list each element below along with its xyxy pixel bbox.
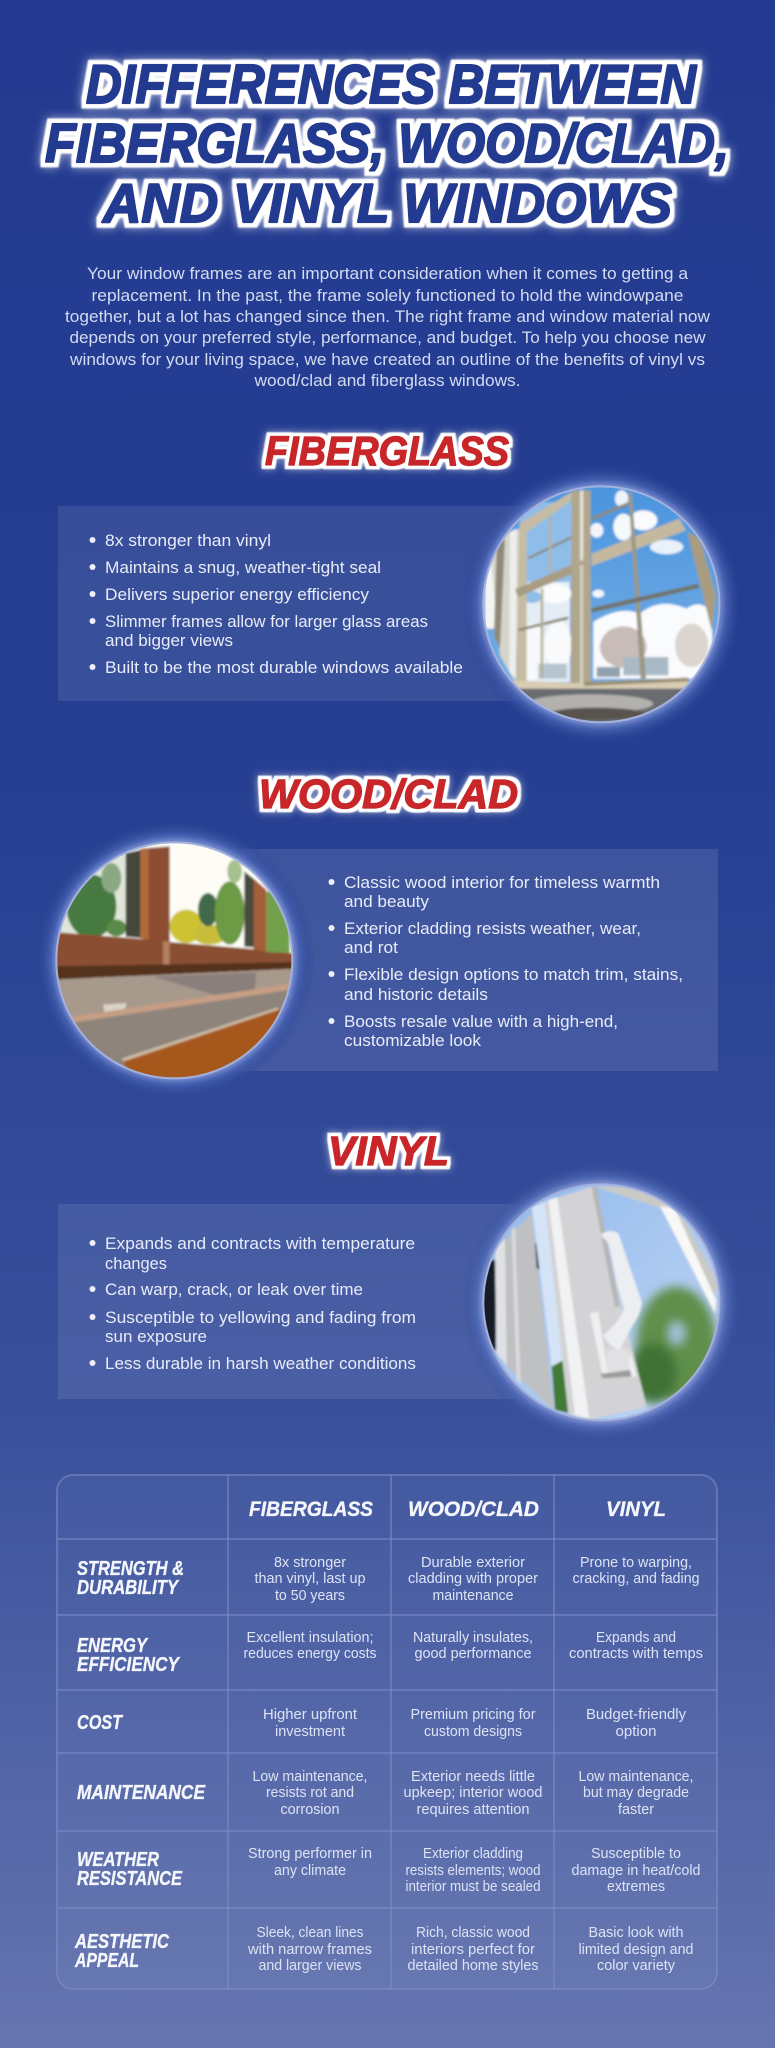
row: strength and durability: STRENGTH &: [77, 1558, 184, 1580]
row: energy efficiency: Expands and: [596, 1630, 676, 1646]
row: strength and durability: cladding with proper: [408, 1571, 538, 1587]
panel: wood/clad: [35, 820, 718, 1100]
row: cost: Premium pricing for: [410, 1707, 536, 1723]
panel: fiberglass: [58, 464, 742, 744]
vinyl bullet list: Can warp, crack, or leak over time: [105, 1280, 363, 1299]
vinyl bullet list: Susceptible to yellowing and fading from: [105, 1308, 416, 1327]
row: strength and durability: 8x stronger: [274, 1555, 346, 1571]
row: cost: Budget-friendly: [586, 1707, 687, 1723]
vinyl bullet list: Less durable in harsh weather conditions: [105, 1354, 416, 1373]
row: strength and durability: DURABILITY: [77, 1577, 179, 1599]
intro paragraph: [65, 265, 710, 390]
row: maintenance: Low maintenance,: [578, 1769, 694, 1785]
row: weather resistance: resists elements; wood: [406, 1863, 540, 1879]
row: maintenance: but may degrade: [583, 1785, 689, 1801]
row: aesthetic appeal: Basic look with: [588, 1925, 684, 1941]
row: strength and durability: to 50 years: [275, 1588, 345, 1604]
row: aesthetic appeal: color variety: [597, 1958, 676, 1974]
title: FIBERGLASS, WOOD/CLAD,: [45, 112, 729, 174]
row: strength and durability: [77, 1555, 700, 1604]
fiberglass bullet list: and bigger views: [105, 631, 233, 650]
row: aesthetic appeal: Rich, classic wood: [416, 1925, 530, 1941]
row: aesthetic appeal: detailed home styles: [408, 1958, 538, 1974]
fiberglass bullet list: Maintains a snug, weather-tight seal: [105, 558, 381, 577]
row: aesthetic appeal: Sleek, clean lines: [256, 1925, 364, 1941]
row: aesthetic appeal: interiors perfect for: [411, 1942, 535, 1958]
photo: white vinyl window handle: [472, 1170, 733, 1434]
fiberglass bullet list: Slimmer frames allow for larger glass areas: [105, 612, 428, 631]
heading: fiberglass: FIBERGLASS: [265, 428, 509, 474]
wood/clad bullet list: Flexible design options to match trim, stains,: [344, 965, 683, 984]
intro paragraph: Your window frames are an important consideration when it comes to getting a: [87, 265, 689, 283]
row: maintenance: faster: [618, 1802, 654, 1818]
row: maintenance: [77, 1769, 694, 1818]
fiberglass bullet list: Built to be the most durable windows available: [105, 658, 463, 677]
row: cost: COST: [77, 1712, 123, 1734]
intro paragraph: windows for your living space, we have created an outline of the benefits of vinyl vs: [69, 351, 705, 369]
wood/clad bullet list: Boosts resale value with a high-end,: [344, 1012, 618, 1031]
row: maintenance: requires attention: [416, 1802, 530, 1818]
row: cost: Higher upfront: [263, 1707, 357, 1723]
row: aesthetic appeal: AESTHETIC: [74, 1931, 169, 1953]
row: aesthetic appeal: with narrow frames: [247, 1942, 372, 1958]
row: cost: option: [616, 1724, 656, 1740]
title: [45, 53, 729, 234]
vinyl bullet list: [90, 1234, 416, 1373]
intro paragraph: together, but a lot has changed since then. The right frame and window material now: [65, 308, 710, 326]
row: energy efficiency: [77, 1630, 703, 1676]
panel background: [230, 849, 718, 1071]
vinyl bullet list: changes: [105, 1254, 167, 1273]
wood/clad bullet list: and historic details: [344, 985, 488, 1004]
row: weather resistance: damage in heat/cold: [572, 1863, 700, 1879]
row: maintenance: upkeep; interior wood: [404, 1785, 542, 1801]
vinyl bullet list: Expands and contracts with temperature: [105, 1234, 415, 1253]
row: strength and durability: maintenance: [432, 1588, 514, 1604]
wood/clad bullet list: Exterior cladding resists weather, wear,: [344, 919, 641, 938]
row: weather resistance: RESISTANCE: [77, 1868, 183, 1890]
wood/clad bullet list: customizable look: [344, 1031, 482, 1050]
wood/clad bullet list: Classic wood interior for timeless warmth: [344, 873, 660, 892]
table header row: VINYL: [606, 1498, 666, 1521]
row: weather resistance: interior must be sealed: [406, 1879, 540, 1895]
row: weather resistance: Susceptible to: [591, 1846, 681, 1862]
fiberglass bullet list: [90, 531, 463, 677]
intro paragraph: wood/clad and fiberglass windows.: [253, 372, 521, 390]
row: maintenance: MAINTENANCE: [77, 1782, 206, 1804]
row: energy efficiency: Naturally insulates,: [413, 1630, 533, 1646]
row: strength and durability: than vinyl, last up: [254, 1571, 366, 1587]
row: energy efficiency: ENERGY: [77, 1635, 148, 1657]
row: energy efficiency: good performance: [414, 1646, 532, 1662]
row: weather resistance: WEATHER: [77, 1849, 159, 1871]
title: DIFFERENCES BETWEEN: [86, 53, 697, 115]
row: aesthetic appeal: APPEAL: [74, 1950, 139, 1972]
row: weather resistance: [77, 1846, 700, 1895]
wood/clad bullet list: and rot: [344, 938, 398, 957]
row: energy efficiency: Excellent insulation;: [246, 1630, 374, 1646]
row: strength and durability: Durable exterior: [421, 1555, 525, 1571]
table grid: [57, 1475, 717, 1989]
row: weather resistance: any climate: [274, 1863, 346, 1879]
title: AND VINYL WINDOWS: [101, 172, 672, 234]
row: maintenance: corrosion: [280, 1802, 340, 1818]
row: weather resistance: extremes: [607, 1879, 665, 1895]
panel background: [58, 1204, 558, 1399]
comparison table: [57, 1475, 717, 1989]
row: weather resistance: Exterior cladding: [423, 1846, 523, 1862]
row: energy efficiency: reduces energy costs: [244, 1646, 376, 1662]
row: cost: [77, 1707, 687, 1740]
wood/clad bullet list: [328, 873, 683, 1050]
vinyl bullet list: sun exposure: [105, 1327, 207, 1346]
panel background: [58, 506, 558, 701]
row: strength and durability: Prone to warping,: [580, 1555, 692, 1571]
row: maintenance: resists rot and: [266, 1785, 354, 1801]
row: weather resistance: Strong performer in: [248, 1846, 372, 1862]
row: aesthetic appeal: [74, 1925, 694, 1974]
heading: vinyl: VINYL: [328, 1128, 449, 1174]
row: energy efficiency: EFFICIENCY: [77, 1654, 180, 1676]
panel: vinyl: [58, 1162, 742, 1442]
intro paragraph: depends on your preferred style, performance, and budget. To help you choose new: [70, 329, 706, 347]
table header row: [249, 1498, 666, 1521]
row: maintenance: Exterior needs little: [411, 1769, 535, 1785]
fiberglass bullet list: 8x stronger than vinyl: [105, 531, 271, 550]
photo: white-framed window with sky: [472, 472, 734, 737]
row: strength and durability: cracking, and fading: [572, 1571, 700, 1587]
row: energy efficiency: contracts with temps: [569, 1646, 703, 1662]
wood/clad bullet list: and beauty: [344, 892, 429, 911]
photo: wood window sill: [44, 828, 303, 1090]
heading: wood/clad: WOOD/CLAD: [259, 771, 518, 817]
row: cost: investment: [275, 1724, 345, 1740]
row: maintenance: Low maintenance,: [252, 1769, 368, 1785]
row: aesthetic appeal: and larger views: [258, 1958, 362, 1974]
table header row: FIBERGLASS: [249, 1498, 373, 1521]
row: cost: custom designs: [424, 1724, 522, 1740]
table header row: WOOD/CLAD: [408, 1498, 539, 1521]
row: aesthetic appeal: limited design and: [578, 1942, 694, 1958]
fiberglass bullet list: Delivers superior energy efficiency: [105, 585, 370, 604]
intro paragraph: replacement. In the past, the frame solely functioned to hold the windowpane: [92, 287, 684, 305]
